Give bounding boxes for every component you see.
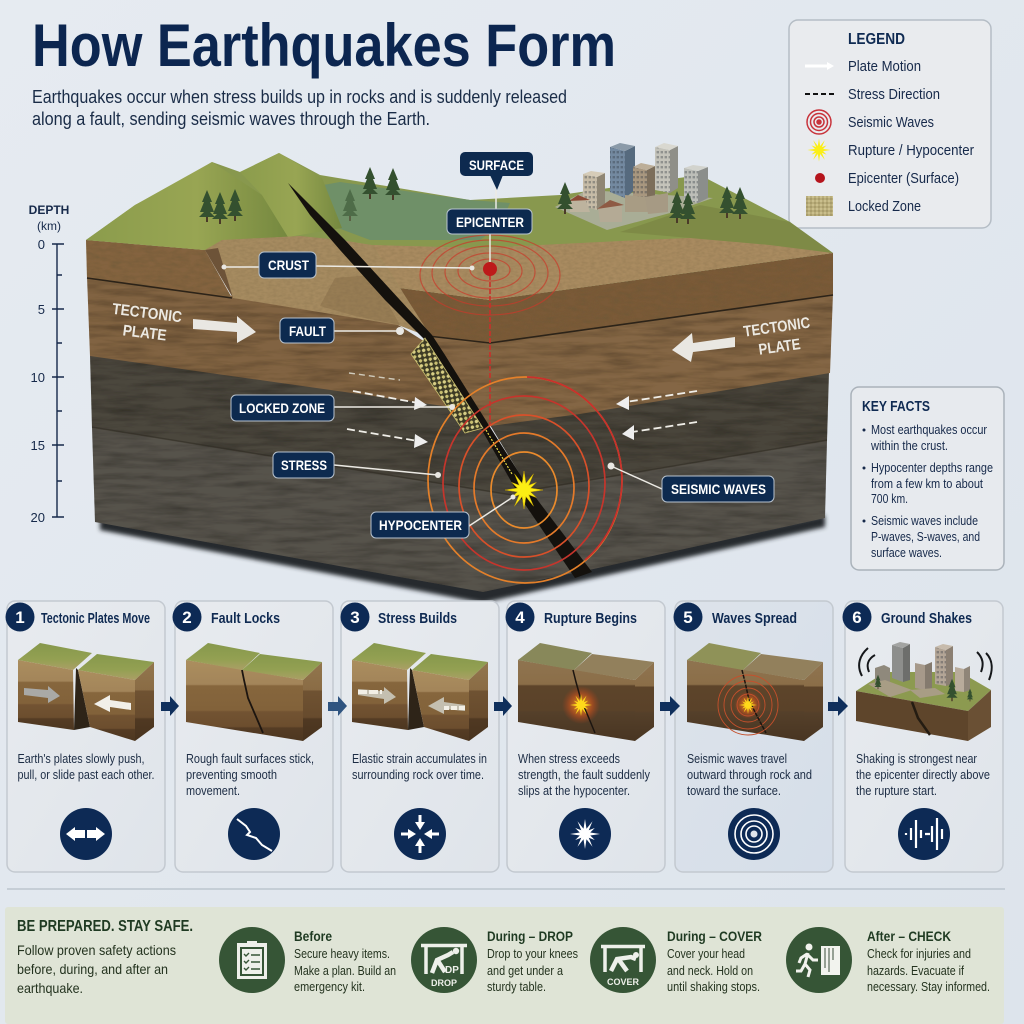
icon: drop: DP: [445, 965, 459, 976]
key facts panel: [851, 387, 1004, 570]
step 3 card: surrounding rock over time.: [352, 768, 484, 782]
plate label left: PLATE: [122, 322, 167, 345]
locked zone: [411, 338, 483, 433]
step 1 card: Tectonic Plates Move: [41, 611, 150, 627]
step 4 card: When stress exceeds: [518, 752, 620, 766]
before text: emergency kit.: [294, 980, 365, 994]
step 2 card: Fault Locks: [211, 611, 280, 627]
legend: seismic waves: Seismic Waves: [848, 115, 934, 131]
step 5 card: outward through rock and: [687, 768, 812, 782]
depth scale: 20: [31, 510, 45, 525]
label: epicenter: EPICENTER: [456, 214, 524, 230]
step 3 card: [340, 601, 499, 872]
layer seams: [87, 278, 833, 343]
after text: necessary. Stay informed.: [867, 980, 990, 994]
icon: waveform: [898, 808, 950, 860]
step 2 card: [172, 601, 333, 872]
step 6 card: 6: [852, 608, 862, 627]
key facts panel: surface waves.: [871, 546, 942, 560]
depth scale: (km): [37, 219, 61, 233]
key facts panel: Seismic waves include: [871, 514, 978, 528]
city: [555, 143, 713, 230]
step 1 card: Earth's plates slowly push,: [18, 752, 144, 766]
label: hypocenter: [371, 512, 469, 538]
icon: drop: DROP: [431, 978, 457, 988]
trees: [199, 167, 748, 224]
fault wedge: [288, 183, 592, 578]
arrow 1 to 2: [161, 696, 179, 716]
key facts panel: P-waves, S-waves, and: [871, 530, 980, 544]
red dashed line from focus: [489, 275, 491, 425]
drop text: sturdy table.: [487, 980, 546, 994]
step 5 card: Waves Spread: [712, 611, 797, 627]
step 4 card: 4: [515, 608, 525, 627]
label: stress: [273, 452, 334, 478]
label: seismic waves: SEISMIC WAVES: [671, 481, 766, 497]
hypocenter star: [505, 471, 543, 509]
title: How Earthquakes Form: [32, 12, 616, 79]
step 6 card: Ground Shakes: [881, 611, 972, 627]
subtitle: Earthquakes occur when stress builds up in rocks and is suddenly released: [32, 86, 567, 107]
legend: locked zone: [806, 196, 921, 216]
stress arrows: [347, 373, 697, 448]
icon: burst: [559, 808, 611, 860]
step 2 card: 2: [182, 608, 192, 627]
legend: stress direction: [805, 87, 940, 103]
plate label right: TECTONIC: [742, 315, 811, 341]
key facts panel: 700 km.: [871, 492, 908, 506]
drop text: and get under a: [487, 964, 563, 978]
icon: exit: [786, 927, 852, 993]
icon: cover: COVER: [607, 977, 639, 987]
plate label left: TECTONIC: [111, 301, 183, 326]
key facts panel: KEY FACTS: [862, 399, 930, 415]
label: crust: [259, 252, 316, 278]
label: seismic waves: [662, 476, 774, 502]
label: epicenter: [447, 209, 532, 234]
safety intro: earthquake.: [17, 980, 83, 996]
icon: drop: [411, 927, 477, 993]
label: locked zone: LOCKED ZONE: [239, 400, 325, 416]
city block illustration: [856, 642, 992, 741]
legend: rupture: Rupture / Hypocenter: [848, 143, 974, 159]
key facts panel: within the crust.: [870, 439, 948, 453]
plate arrow left: [193, 316, 256, 343]
arrow 5 to 6: [828, 696, 848, 716]
safety heading: BE PREPARED. STAY SAFE.: [17, 918, 193, 935]
before text: Before: [294, 929, 332, 944]
block diagram: [86, 143, 833, 603]
depth scale: 5: [38, 302, 45, 317]
step 4 card: [506, 601, 665, 872]
left face rock layers: [87, 276, 578, 592]
plate label right: PLATE: [758, 336, 802, 359]
arrow 2 to 3: [328, 696, 347, 716]
depth scale: 10: [31, 370, 45, 385]
leader lines: [222, 187, 662, 526]
safety intro: before, during, and after an: [17, 961, 168, 977]
cover text: until shaking stops.: [667, 980, 760, 994]
label: stress: STRESS: [281, 457, 327, 473]
ground surface: [86, 153, 833, 338]
block illustration: [18, 643, 154, 741]
cover text: and neck. Hold on: [667, 964, 753, 978]
step 4 card: slips at the hypocenter.: [518, 784, 630, 798]
step 1 card: [6, 601, 165, 872]
icon: compress: [394, 808, 446, 860]
step 5 card: toward the surface.: [687, 784, 781, 798]
legend: rupture: [807, 138, 974, 162]
block illustration: [687, 643, 823, 741]
after text: Check for injuries and: [867, 947, 971, 961]
arrow 4 to 5: [660, 696, 680, 716]
step 2 card: movement.: [186, 784, 240, 798]
before text: [294, 929, 396, 994]
after text: [867, 929, 990, 994]
step 5 card: Seismic waves travel: [687, 752, 787, 766]
block illustration: [518, 643, 654, 741]
step 6 card: the rupture start.: [856, 784, 937, 798]
step 2 card: preventing smooth: [186, 768, 277, 782]
drop text: [487, 929, 578, 994]
depth scale: DEPTH: [29, 203, 69, 217]
step 5 card: [674, 601, 833, 872]
plate arrow right: [672, 333, 735, 362]
label: fault: [280, 318, 334, 343]
block illustration: [352, 643, 488, 741]
step 1 card: 1: [15, 608, 25, 627]
step 2 card: Rough fault surfaces stick,: [186, 752, 314, 766]
crust front faces: [86, 240, 833, 342]
ground shadow: [100, 515, 825, 603]
drop text: Drop to your knees: [487, 947, 578, 961]
depth scale: 0: [38, 237, 45, 252]
right face rock layers: [428, 293, 833, 572]
step 6 card: [842, 601, 1003, 872]
icon: cover: [590, 927, 656, 993]
step 4 card: Rupture Begins: [544, 611, 637, 627]
after text: hazards. Evacuate if: [867, 964, 964, 978]
icon: clipboard: [219, 927, 285, 993]
before text: Secure heavy items.: [294, 947, 390, 961]
icon: crack: [228, 808, 280, 860]
cover text: [667, 929, 762, 994]
key facts panel: from a few km to about: [871, 477, 983, 491]
step 6 card: the epicenter directly above: [856, 768, 990, 782]
label: crust: CRUST: [268, 257, 309, 273]
step 5 card: 5: [683, 608, 693, 627]
label: surface: SURFACE: [469, 157, 524, 173]
legend: stress direction: Stress Direction: [848, 87, 940, 103]
legend: seismic waves: [807, 110, 934, 134]
step 3 card: 3: [350, 608, 360, 627]
surface rings: [420, 235, 560, 315]
cover text: During – COVER: [667, 929, 762, 944]
safety intro: Follow proven safety actions: [17, 942, 176, 958]
plate label right: [742, 315, 814, 360]
seismic rings: [428, 377, 622, 583]
legend panel: LEGEND: [848, 31, 905, 48]
label: surface: [460, 152, 533, 190]
depth scale: 15: [31, 438, 45, 453]
safety intro: [17, 942, 176, 996]
step 1 card: pull, or slide past each other.: [18, 768, 154, 782]
plate label left: [109, 301, 183, 346]
step 3 card: Elastic strain accumulates in: [352, 752, 487, 766]
label: locked zone: [231, 395, 334, 421]
legend: plate motion: Plate Motion: [848, 59, 921, 75]
label: fault: FAULT: [289, 323, 326, 339]
legend: plate motion: [805, 59, 921, 75]
safety band: [5, 907, 1004, 1024]
legend: epicenter: Epicenter (Surface): [848, 171, 959, 187]
key facts panel: Most earthquakes occur: [871, 423, 987, 437]
subtitle: [32, 86, 567, 129]
before text: Make a plan. Build an: [294, 964, 396, 978]
key facts panel: Hypocenter depths range: [871, 461, 993, 475]
label: hypocenter: HYPOCENTER: [379, 517, 462, 533]
after text: After – CHECK: [867, 929, 951, 944]
drop text: During – DROP: [487, 929, 573, 944]
depth scale: [29, 203, 69, 525]
lower seams: [92, 427, 827, 497]
step 6 card: Shaking is strongest near: [856, 752, 977, 766]
legend: locked zone: Locked Zone: [848, 199, 921, 215]
icon: concentric waves: [728, 808, 780, 860]
cover text: Cover your head: [667, 947, 745, 961]
arrow 3 to 4: [494, 696, 512, 716]
step 4 card: strength, the fault suddenly: [518, 768, 651, 782]
icon: push arrows: [60, 808, 112, 860]
block illustration: [186, 643, 322, 741]
legend panel: [789, 20, 991, 228]
subtitle: along a fault, sending seismic waves through the Earth.: [32, 108, 430, 129]
epicenter dot: [483, 262, 497, 276]
step 3 card: Stress Builds: [378, 611, 457, 627]
